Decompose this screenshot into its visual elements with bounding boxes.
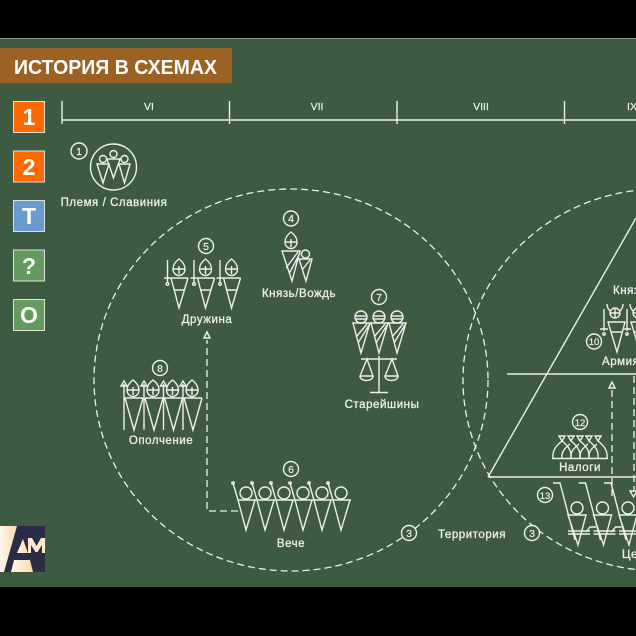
retinue: 5: [203, 241, 209, 253]
territory markers: [402, 526, 540, 541]
assembly: 6: [288, 464, 294, 476]
state pyramid: [488, 218, 636, 477]
button O: [14, 300, 44, 330]
timeline: VII: [311, 101, 323, 113]
tribe icon: [61, 143, 167, 209]
button 1: 1: [23, 104, 36, 130]
army: 10: [589, 337, 599, 348]
territory markers: 3: [529, 528, 535, 540]
territory circles: [94, 189, 636, 571]
army: [586, 304, 636, 368]
retinue: [164, 238, 240, 326]
militia: Ополчение: [129, 435, 193, 447]
bottom band: [0, 587, 636, 636]
elders: [345, 290, 419, 411]
timeline: VIII: [473, 101, 489, 113]
arrow: assembly to retinue: [204, 332, 238, 511]
peasants: 13: [540, 491, 550, 502]
militia: 8: [157, 363, 163, 375]
peasants: [538, 483, 636, 561]
logo: [0, 526, 45, 572]
assembly: Вече: [277, 538, 305, 550]
territory markers: 3: [406, 528, 412, 540]
taxes: Налоги: [559, 462, 601, 474]
button question: [14, 250, 44, 281]
timeline: [62, 101, 636, 124]
elders: 7: [376, 292, 382, 304]
timeline: VI: [144, 101, 154, 113]
elders: Старейшины: [345, 399, 419, 411]
prince and chief: 4: [288, 213, 294, 225]
button 1: [14, 102, 44, 132]
retinue: Дружина: [182, 314, 232, 326]
button question: ?: [22, 253, 36, 279]
prince and chief: [262, 211, 336, 300]
taxes: [552, 414, 608, 474]
button O: O: [20, 302, 38, 328]
button 2: 2: [23, 154, 35, 180]
navigation buttons: [14, 102, 44, 330]
militia: [121, 360, 202, 447]
assembly: [232, 462, 351, 550]
title: ИСТОРИЯ В СХЕМАХ: [14, 57, 218, 79]
title: [0, 48, 232, 83]
dashed arrows: taxes and services: [609, 376, 636, 500]
taxes: 12: [575, 418, 585, 429]
prince and chief: Князь/Вождь: [262, 288, 336, 300]
button T: T: [22, 203, 36, 229]
tribe icon: 1: [76, 146, 82, 158]
button T: [14, 200, 44, 232]
tribe icon: Племя / Славиния: [61, 197, 167, 209]
territory markers: Территория: [438, 529, 506, 541]
button 2: [14, 151, 44, 182]
